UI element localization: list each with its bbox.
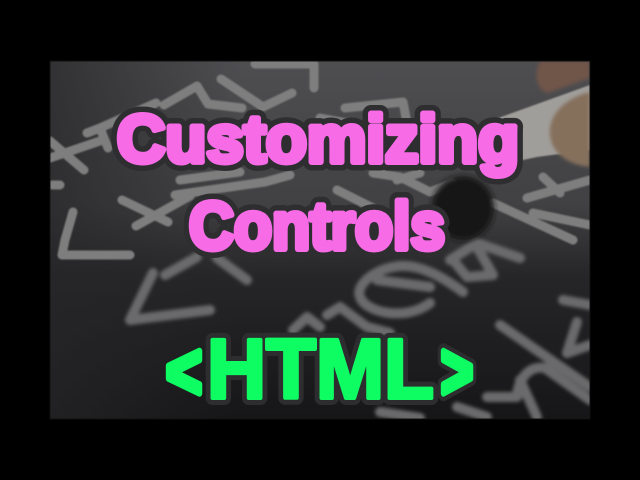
tag fill: > xyxy=(441,327,473,415)
tag label: HTML xyxy=(166,322,473,416)
tag outline: HTML xyxy=(207,322,434,416)
chalk writing, upper area xyxy=(50,64,590,255)
title: Customizing Controls xyxy=(117,102,519,264)
photo panel: chalkboard xyxy=(50,61,590,419)
title line: Customizing: Customizing xyxy=(117,102,519,177)
infographic canvas xyxy=(50,60,590,420)
frame edge xyxy=(50,61,590,419)
tag fill: HTML xyxy=(207,322,434,416)
title line: Controls: Controls xyxy=(189,189,445,264)
ink smudge xyxy=(432,176,494,240)
tag fill: < xyxy=(166,327,202,415)
title line: Customizing: Customizing xyxy=(117,102,519,177)
chalk writing, lower area xyxy=(130,243,590,418)
title line: Controls: Controls xyxy=(189,189,445,264)
chalk stick xyxy=(476,85,590,165)
hand fingers xyxy=(536,61,590,167)
tag outline: > xyxy=(441,327,473,415)
